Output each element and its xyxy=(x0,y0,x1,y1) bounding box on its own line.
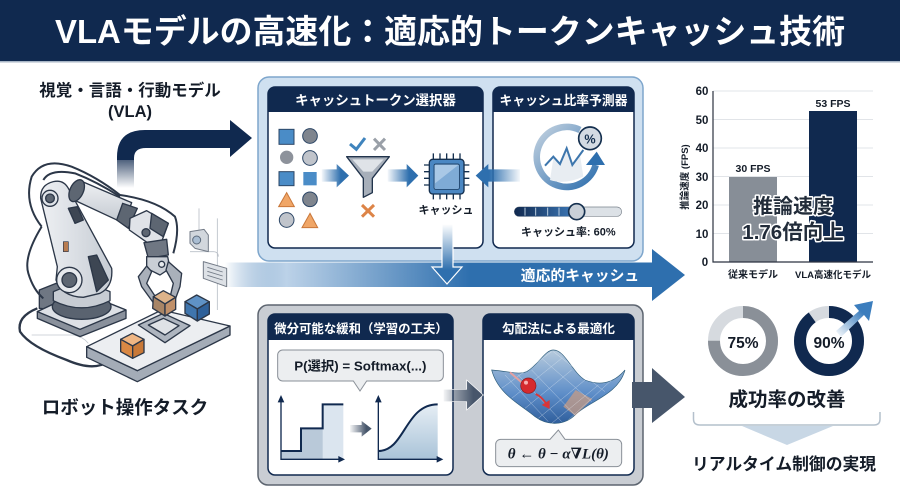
panel: cache token selector xyxy=(268,87,483,248)
label: cache: キャッシュ xyxy=(419,205,473,217)
callout: speed increase: 推論速度 xyxy=(753,195,833,218)
bar chart: inference speed: 53 FPS xyxy=(815,98,851,110)
callout: update formula xyxy=(496,430,622,467)
axis ticks xyxy=(696,86,708,269)
arrow: cache down xyxy=(432,224,462,284)
panel: cache token selector: キャッシュトークン選択器 xyxy=(295,92,456,108)
label: success rate: 成功率の改善 xyxy=(728,388,846,411)
axis title: 推論速度 (FPS) xyxy=(679,144,691,210)
arrow: adaptive cache xyxy=(225,249,685,301)
panel: differentiable relaxation: 微分可能な緩和（学習の工夫） xyxy=(274,321,448,336)
axis ticks: 20 xyxy=(696,200,708,212)
arrow: to results xyxy=(632,368,685,423)
robot arm lower link xyxy=(41,181,112,297)
robot cables xyxy=(27,163,177,298)
panel: differentiable training (bottom) xyxy=(258,305,643,485)
icon: faded control panels xyxy=(190,208,227,310)
icon: ratio gauge xyxy=(537,127,605,187)
icon: ratio gauge: % xyxy=(584,132,596,146)
axis ticks: 60 xyxy=(696,86,708,98)
axis ticks: 50 xyxy=(696,115,708,127)
cable to table xyxy=(20,308,108,366)
arrow: tokens to filter xyxy=(322,164,349,187)
donut: 75 percent xyxy=(714,312,772,370)
bar: VLA accelerated model xyxy=(809,111,857,262)
label: cache rate: キャッシュ率: 60% xyxy=(521,225,616,239)
blue cube xyxy=(185,295,209,321)
robot gripper xyxy=(138,262,182,305)
label: real-time control: リアルタイム制御の実現 xyxy=(692,455,876,474)
panel: cache (top) xyxy=(258,77,643,261)
title banner xyxy=(0,0,900,62)
panel: cache ratio predictor xyxy=(493,87,634,248)
axis ticks: 40 xyxy=(696,143,708,155)
slider: cache rate xyxy=(514,204,622,220)
icon: cache chip xyxy=(424,153,469,199)
robot arm upper cylinder xyxy=(66,177,137,228)
cache selector and predictor contents xyxy=(279,127,622,239)
robot wrist xyxy=(129,211,170,275)
robot illustration xyxy=(20,163,230,382)
bar values: 30 FPS xyxy=(735,163,771,175)
arrow: predictor to chip xyxy=(476,164,520,187)
panel: gradient optimization xyxy=(483,314,634,475)
donut: 90 percent: 90% xyxy=(813,335,845,352)
arrow: robot to cache panel xyxy=(117,120,252,188)
callout: softmax: P(選択) = Softmax(...) xyxy=(294,358,426,374)
chart: smooth curve xyxy=(375,395,443,463)
arrow: relaxation to optimization xyxy=(443,380,483,410)
category labels: 従来モデル xyxy=(728,268,778,281)
axis ticks: 10 xyxy=(696,229,708,241)
title banner: VLAモデルの高速化：適応的トークンキャッシュ技術 xyxy=(55,13,845,50)
callout: speed increase: 1.76倍向上 xyxy=(742,221,844,244)
chart: step function xyxy=(278,395,345,463)
orange cube xyxy=(121,333,144,358)
heading: VLA model: 視覚・言語・行動モデル xyxy=(39,80,221,100)
donut: 90 percent xyxy=(800,301,873,370)
relaxation and optimization contents xyxy=(278,350,625,467)
work table xyxy=(87,310,230,382)
arrow: adaptive cache: 適応的キャッシュ xyxy=(521,266,639,284)
callout: update formula: θ ← θ − α∇L(θ) xyxy=(508,447,609,463)
bar chart: inference speed xyxy=(679,86,873,281)
arrow: improvement xyxy=(836,301,873,337)
donut: 75 percent: 75% xyxy=(727,335,759,352)
heading: VLA model xyxy=(39,80,221,121)
axis ticks: 30 xyxy=(696,172,708,184)
label: robot task: ロボット操作タスク xyxy=(42,397,208,418)
panel: cache ratio predictor: キャッシュ比率予測器 xyxy=(500,93,628,108)
bar: conventional model xyxy=(729,177,777,262)
held brown cube xyxy=(153,291,176,316)
callout: speed increase xyxy=(742,195,844,244)
arrow: step to smooth xyxy=(350,421,372,437)
chart: loss surface xyxy=(492,350,625,423)
callout: softmax xyxy=(278,350,443,391)
heading: VLA model: (VLA) xyxy=(108,103,152,121)
panel: differentiable relaxation xyxy=(268,314,453,475)
icons: token grid xyxy=(279,129,318,228)
bar chart: inference speed: VLA高速化モデル xyxy=(795,269,871,281)
robot base xyxy=(37,283,126,337)
axis ticks: 0 xyxy=(702,257,708,269)
bracket and down arrow xyxy=(694,412,880,445)
panel: gradient optimization: 勾配法による最適化 xyxy=(502,321,615,336)
icon: funnel filter xyxy=(347,138,389,217)
arrow: filter to chip xyxy=(388,164,418,187)
